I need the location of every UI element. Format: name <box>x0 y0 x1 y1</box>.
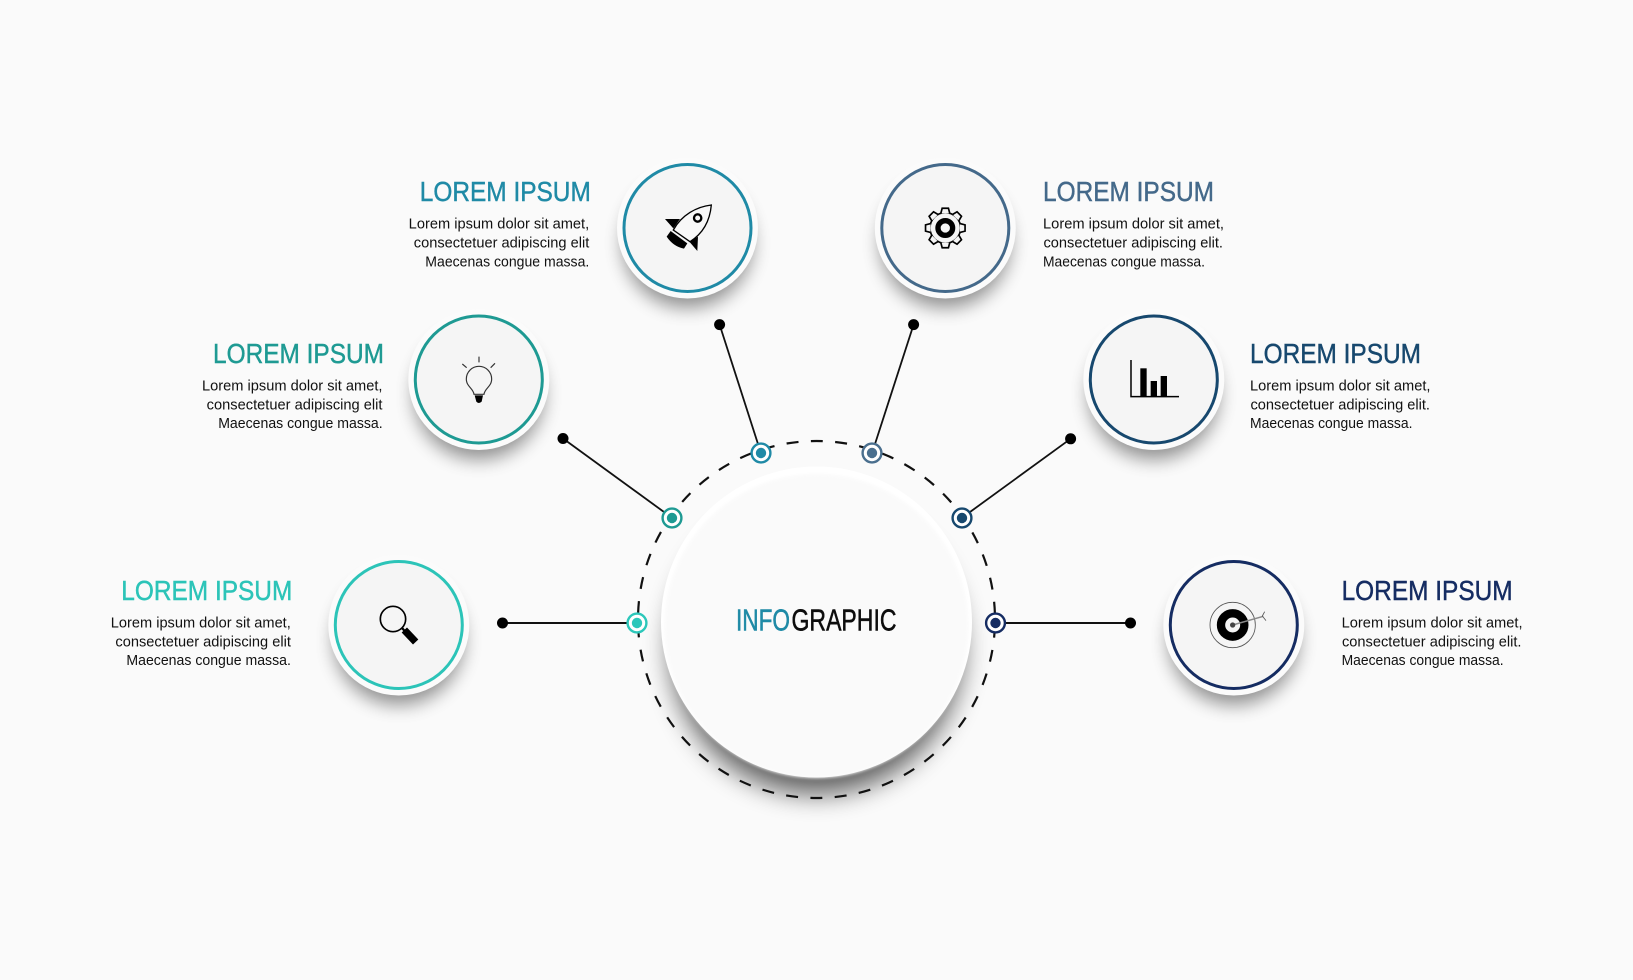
text: gear: LOREM IPSUM <box>1043 176 1214 207</box>
text: chart: Lorem ipsum dolor sit amet, <box>1250 378 1430 394</box>
text: target <box>1342 575 1523 669</box>
text: idea: Lorem ipsum dolor sit amet, <box>202 378 382 394</box>
panel: target <box>1163 554 1304 705</box>
text: chart <box>1250 338 1430 432</box>
central circle <box>661 466 972 794</box>
text: rocket: Maecenas congue massa. <box>425 255 589 271</box>
connector: rocket <box>714 319 770 462</box>
text: rocket: consectetuer adipiscing elit <box>414 236 589 252</box>
connector: gear <box>863 319 919 462</box>
connector: chart <box>953 433 1076 527</box>
connector: target <box>986 614 1136 632</box>
icon: bar chart <box>1131 360 1179 397</box>
center title <box>736 602 896 638</box>
text: chart: consectetuer adipiscing elit. <box>1250 397 1430 413</box>
center title: GRAPHIC <box>792 602 896 638</box>
icon: light bulb <box>462 357 495 403</box>
text: target: Maecenas congue massa. <box>1342 653 1504 669</box>
text: target: LOREM IPSUM <box>1342 575 1513 606</box>
text: chart: LOREM IPSUM <box>1250 338 1421 369</box>
text: target: Lorem ipsum dolor sit amet, <box>1342 616 1523 632</box>
text: idea: consectetuer adipiscing elit <box>207 397 382 413</box>
text: search: consectetuer adipiscing elit <box>115 634 291 650</box>
icon: target with arrow <box>1210 602 1266 648</box>
text: gear: consectetuer adipiscing elit. <box>1044 236 1223 252</box>
panel: gear <box>875 158 1016 308</box>
panel: chart <box>1083 309 1224 460</box>
icon: gear <box>926 208 965 248</box>
connector: idea <box>558 433 681 527</box>
icon: rocket <box>665 205 711 251</box>
center title: INFO <box>736 602 790 638</box>
text: idea <box>202 338 384 432</box>
panel: idea <box>408 309 549 460</box>
text: rocket <box>409 176 591 271</box>
text: gear: Lorem ipsum dolor sit amet, <box>1043 217 1224 233</box>
text: rocket: Lorem ipsum dolor sit amet, <box>409 217 589 233</box>
text: rocket: LOREM IPSUM <box>420 176 591 207</box>
text: search: Lorem ipsum dolor sit amet, <box>111 616 291 632</box>
panel: rocket <box>617 158 758 308</box>
icon: magnifier <box>380 606 416 642</box>
text: idea: Maecenas congue massa. <box>218 416 383 432</box>
text: gear <box>1043 176 1224 271</box>
text: target: consectetuer adipiscing elit. <box>1342 634 1522 650</box>
text: search <box>111 575 292 669</box>
dashed ring <box>638 441 995 798</box>
panel: search <box>328 554 469 705</box>
text: search: LOREM IPSUM <box>121 575 292 606</box>
text: chart: Maecenas congue massa. <box>1250 416 1412 432</box>
text: gear: Maecenas congue massa. <box>1043 255 1205 271</box>
connector: search <box>497 614 646 632</box>
text: search: Maecenas congue massa. <box>126 653 291 669</box>
text: idea: LOREM IPSUM <box>213 338 384 369</box>
